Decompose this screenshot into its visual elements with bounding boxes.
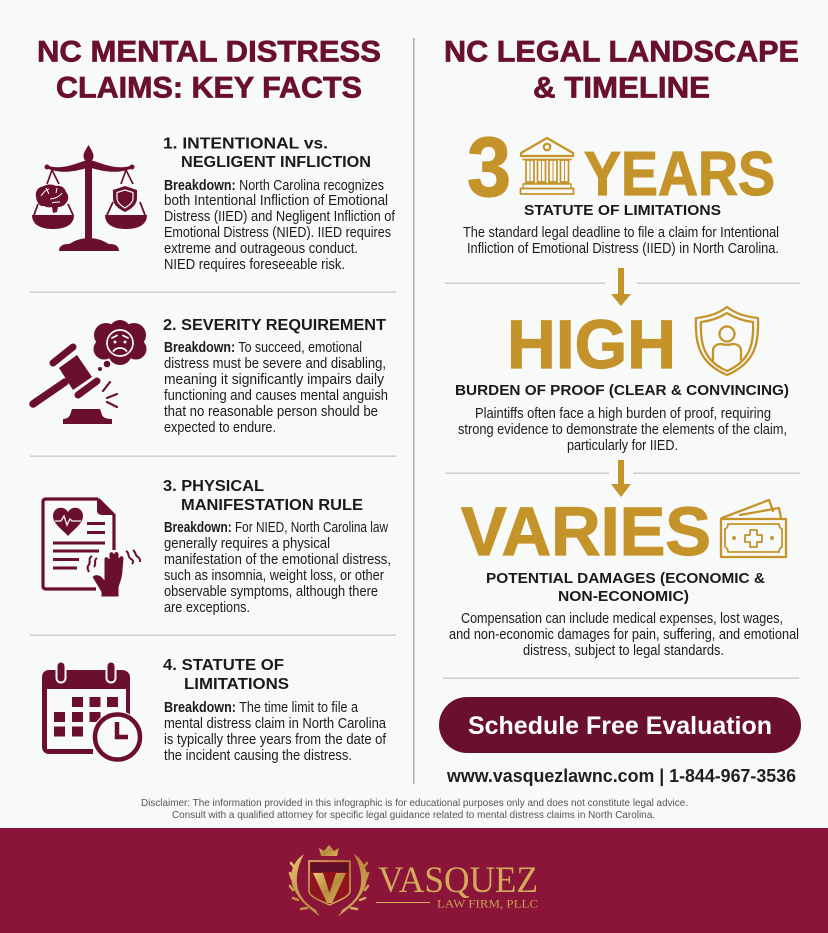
- heading: intentional vs negligent infliction: [163, 136, 371, 171]
- text: breakdown 2: functioning and causes mental anguish: [164, 388, 388, 404]
- icon: scales with brain and shield: [32, 145, 147, 251]
- text: breakdown 3: manifestation of the emotional distress,: [164, 552, 391, 568]
- heading: statute of limitations: 4. STATUTE OF: [163, 657, 284, 674]
- text: breakdown 1: Breakdown: North Carolina recognizes: [164, 178, 384, 194]
- stat: varies: VARIES: [461, 493, 711, 570]
- heading: NC Mental Distress Claims: Key Facts: CLAIMS: KEY FACTS: [56, 72, 362, 104]
- stat: 3 years: 3: [467, 120, 511, 214]
- text: breakdown 4: the incident causing the distress.: [164, 748, 352, 764]
- text: statute description: [463, 225, 779, 257]
- text: breakdown 2: that no reasonable person should be: [164, 404, 378, 420]
- footer band: [0, 828, 828, 933]
- heading: severity requirement: 2. SEVERITY REQUIREMENT: [163, 317, 386, 334]
- text: burden description: particularly for IIED.: [567, 438, 678, 454]
- panel: 3 years statute of limitations: [463, 120, 779, 257]
- panel: high burden of proof: [455, 306, 789, 454]
- text: damages description: distress, subject to legal standards.: [523, 643, 724, 659]
- text: disclaimer: Disclaimer: The information provided in this infographic is for educational purposes only and does not constitute legal advice.: [141, 797, 688, 809]
- text: burden description: [458, 406, 787, 454]
- heading: NC Mental Distress Claims: Key Facts: [37, 36, 381, 104]
- logo: Vasquez Law Firm wordmark: VASQUEZ: [378, 860, 538, 901]
- heading: physical manifestation rule: MANIFESTATION RULE: [181, 497, 363, 514]
- logo: Vasquez Law Firm wordmark: LAW FIRM, PLLC: [437, 896, 538, 910]
- text: breakdown 3: [164, 520, 391, 616]
- text: breakdown 3: Breakdown: For NIED, North Carolina law: [164, 520, 388, 536]
- logo: Vasquez crest: [290, 845, 368, 917]
- heading: intentional vs negligent infliction: 1. INTENTIONAL vs.: [163, 136, 328, 152]
- heading: statute of limitations: [163, 657, 289, 693]
- icon: money with medical cross: [721, 500, 786, 557]
- heading: physical manifestation rule: [163, 478, 363, 514]
- text: breakdown 3: observable symptoms, although there: [164, 584, 378, 600]
- text: breakdown 1: Distress (IIED) and Negligent Infliction of: [164, 209, 396, 225]
- heading: NC Mental Distress Claims: Key Facts: NC MENTAL DISTRESS: [37, 36, 381, 68]
- text: statute description: Infliction of Emotional Distress (IIED) in North Carolina.: [467, 241, 779, 257]
- text: disclaimer: Consult with a qualified attorney for specific legal guidance related to mental distress claims in North Carolina.: [172, 809, 655, 821]
- heading: potential damages: [486, 571, 766, 605]
- text: burden description: strong evidence to demonstrate the elements of the claim,: [458, 422, 787, 438]
- icon: gavel with thought bubble: [33, 320, 146, 424]
- heading: NC Legal Landscape & Timeline: [444, 36, 799, 104]
- text: breakdown 2: [164, 340, 388, 436]
- text: breakdown 1: Emotional Distress (NIED). IIED requires: [164, 225, 391, 241]
- heading: potential damages: NON-ECONOMIC): [558, 589, 689, 605]
- panel: fact 4 statute of limitations: [42, 657, 387, 764]
- text: breakdown 2: expected to endure.: [164, 420, 276, 436]
- icon: shield with person: [696, 307, 758, 375]
- text: disclaimer: [141, 797, 688, 821]
- text: breakdown 3: generally requires a physical: [164, 536, 330, 552]
- stat: 3 years: YEARS: [584, 140, 775, 209]
- heading: physical manifestation rule: 3. PHYSICAL: [163, 478, 264, 495]
- button: schedule free evaluation: [439, 697, 801, 753]
- text: damages description: Compensation can include medical expenses, lost wages,: [461, 611, 783, 627]
- text: breakdown 4: is typically three years from the date of: [164, 732, 387, 748]
- heading: burden of proof: BURDEN OF PROOF (CLEAR & CONVINCING): [455, 383, 789, 399]
- panel: fact 1 intentional vs negligent: [32, 136, 396, 273]
- arrow: down to varies: [611, 460, 631, 497]
- text: breakdown 4: [164, 700, 387, 764]
- text: damages description: [449, 611, 799, 659]
- icon: calendar with clock: [42, 662, 144, 763]
- text: website and phone: www.vasquezlawnc.com | 1-844-967-3536: [446, 766, 796, 786]
- stat: high: HIGH: [507, 306, 676, 383]
- text: breakdown 4: mental distress claim in North Carolina: [164, 716, 386, 732]
- heading: potential damages: POTENTIAL DAMAGES (ECONOMIC &: [486, 571, 766, 587]
- heading: statute of limitations: LIMITATIONS: [184, 676, 289, 693]
- text: breakdown 4: Breakdown: The time limit to file a: [164, 700, 358, 716]
- text: breakdown 1: NIED requires foreseeable risk.: [164, 257, 345, 273]
- text: breakdown 1: extreme and outrageous conduct.: [164, 241, 358, 257]
- text: breakdown 3: such as insomnia, weight loss, or other: [164, 568, 384, 584]
- button: schedule free evaluation: Schedule Free Evaluation: [468, 712, 772, 740]
- text: burden description: Plaintiffs often face a high burden of proof, requiring: [475, 406, 771, 422]
- text: breakdown 1: both Intentional Infliction of Emotional: [164, 193, 388, 209]
- text: breakdown 3: are exceptions.: [164, 600, 250, 616]
- stat: 3 years: [467, 120, 775, 214]
- heading: intentional vs negligent infliction: NEGLIGENT INFLICTION: [181, 154, 371, 171]
- heading: NC Legal Landscape & Timeline: NC LEGAL LANDSCAPE: [444, 36, 799, 68]
- heading: statute of limitations: STATUTE OF LIMITATIONS: [524, 203, 721, 219]
- text: breakdown 2: meaning it significantly impairs daily: [164, 372, 385, 388]
- text: statute description: The standard legal deadline to file a claim for Intentional: [463, 225, 779, 241]
- heading: NC Legal Landscape & Timeline: & TIMELINE: [533, 72, 710, 104]
- arrow: down to high: [611, 268, 631, 306]
- icon: courthouse: [520, 138, 574, 194]
- text: breakdown 2: Breakdown: To succeed, emotional: [164, 340, 362, 356]
- panel: fact 2 severity requirement: [33, 317, 388, 436]
- panel: varies potential damages: [449, 493, 799, 659]
- text: breakdown 2: distress must be severe and disabling,: [164, 356, 386, 372]
- icon: medical report and trembling hand: [43, 498, 140, 597]
- text: breakdown 1: [164, 178, 396, 273]
- panel: fact 3 physical manifestation rule: [43, 478, 391, 616]
